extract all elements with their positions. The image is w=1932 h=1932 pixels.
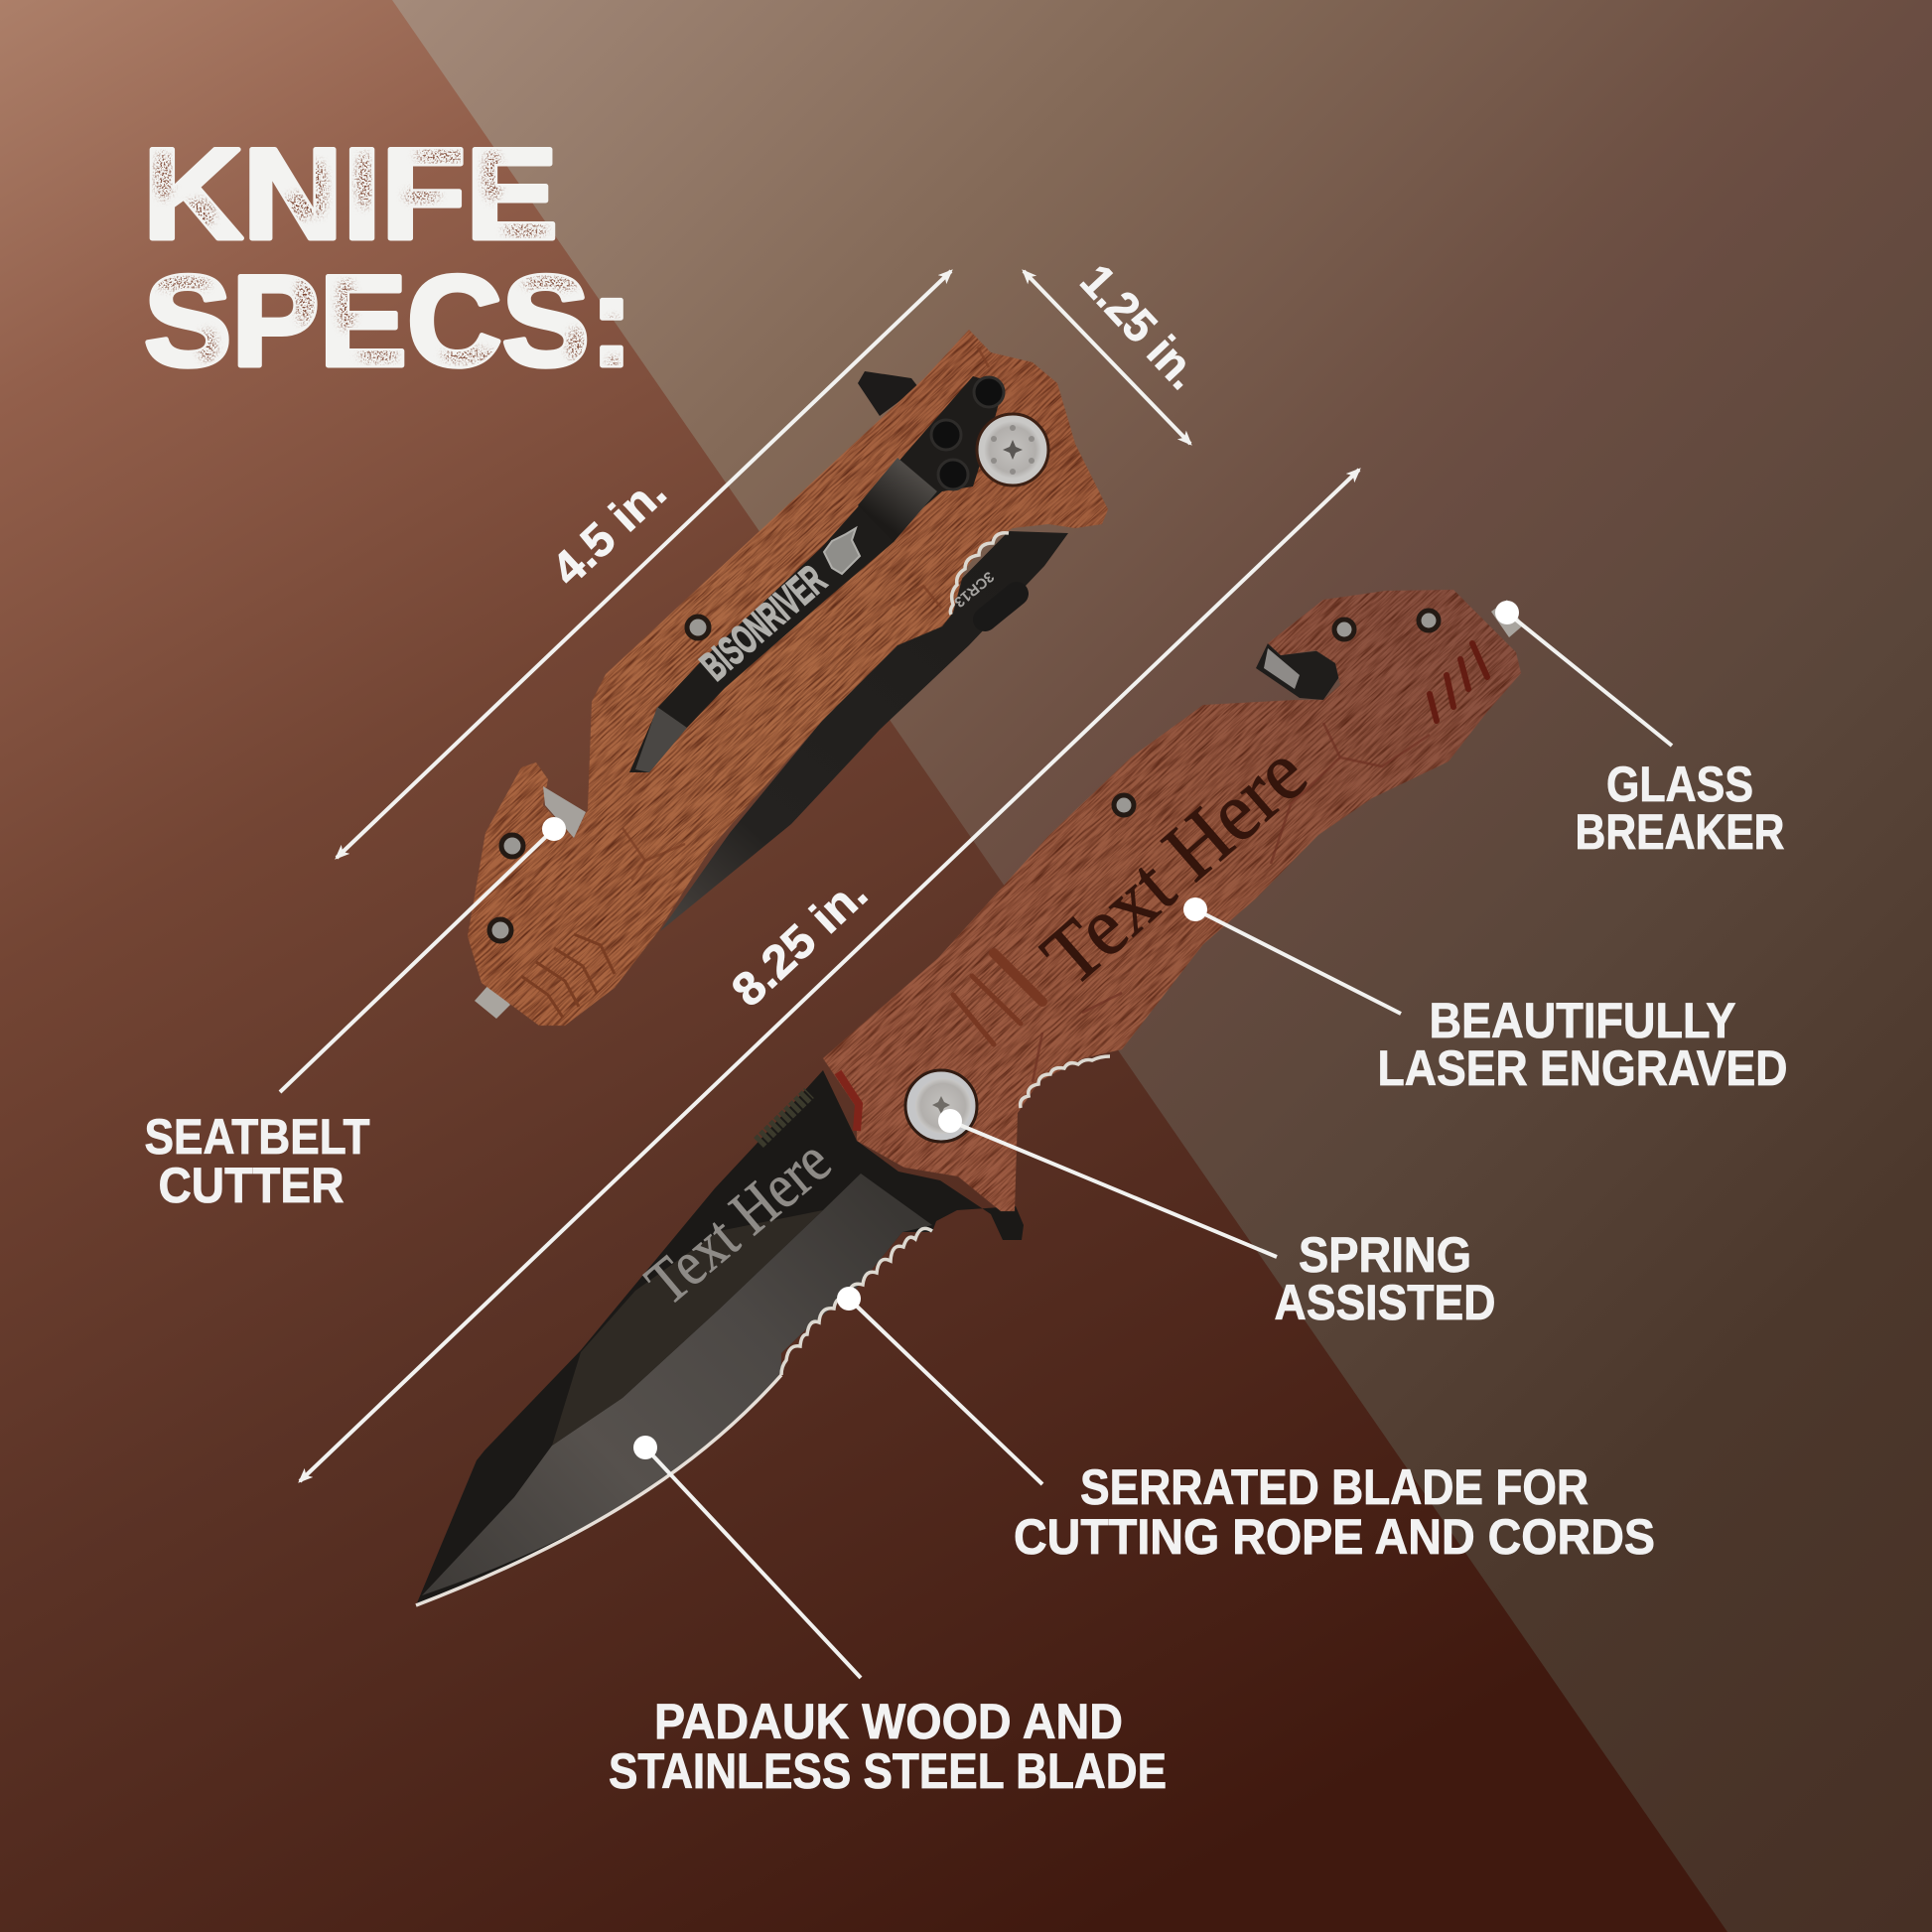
pivot screw	[977, 414, 1048, 485]
pivot screw	[905, 1070, 977, 1142]
small screws	[1114, 611, 1439, 815]
dimension: 8.25 in.	[300, 470, 1359, 1481]
dimension: 4.5 in.: 4.5 in.	[541, 465, 676, 596]
callout: seatbelt cutter: SEATBELT	[145, 1109, 369, 1165]
bison river logo: BISONRIVER	[691, 556, 835, 689]
callout: serrated blade: CUTTING ROPE AND CORDS	[1014, 1509, 1655, 1565]
title: SPECS:	[144, 248, 633, 393]
thumb stud	[985, 594, 1017, 620]
blade engraved text: Text Here	[632, 1125, 843, 1318]
thumb stud	[759, 1093, 809, 1143]
callout: materials: STAINLESS STEEL BLADE	[609, 1743, 1167, 1799]
background light diagonal overlay	[392, 0, 1932, 1932]
handle slot and clip	[629, 376, 1004, 772]
wood veins	[622, 347, 989, 880]
wood handle	[513, 241, 1831, 1560]
serrated edge	[950, 533, 1009, 615]
hook metal	[1256, 643, 1343, 700]
wood veins	[1033, 723, 1430, 1082]
callout: serrated blade	[837, 1287, 1655, 1565]
clip highlight	[858, 458, 937, 542]
knife: folded back view	[120, 10, 1455, 1345]
callout: laser engraved	[1183, 897, 1787, 1096]
callout: glass breaker: BREAKER	[1575, 804, 1785, 860]
glass breaker tip	[475, 983, 510, 1019]
seatbelt cutter metal	[543, 786, 586, 838]
callout: laser engraved: LASER ENGRAVED	[1378, 1040, 1787, 1096]
dimension: 1.25 in.: 1.25 in.	[1071, 254, 1211, 399]
callout: laser engraved: BEAUTIFULLY	[1430, 993, 1735, 1048]
callout: spring assisted: SPRING	[1299, 1227, 1471, 1283]
callout: glass breaker: GLASS	[1606, 757, 1753, 812]
callout: materials: PADAUK WOOD AND	[654, 1694, 1123, 1749]
grip lines	[953, 953, 1042, 1044]
callout: seatbelt cutter: CUTTER	[159, 1158, 344, 1213]
bison head icon	[824, 528, 860, 574]
wood handle	[120, 10, 1455, 1345]
callout: serrated blade: SERRATED BLADE FOR	[1080, 1459, 1588, 1515]
slash marks	[1430, 643, 1487, 721]
blade edge	[416, 1375, 781, 1605]
blade mid shade	[552, 1210, 823, 1446]
callout: materials	[609, 1436, 1167, 1799]
callout: spring assisted: ASSISTED	[1275, 1275, 1495, 1330]
steel marking: 3CR13	[951, 568, 997, 611]
callout: glass breaker	[1495, 601, 1785, 860]
handle serration	[1021, 1056, 1110, 1108]
dimension: 4.5 in.	[337, 271, 951, 858]
serrated edge	[781, 1228, 932, 1375]
handle engraved text: Text Here	[1025, 727, 1323, 1004]
title	[145, 147, 623, 369]
dimension: 1.25 in.	[1024, 254, 1211, 444]
handle red end	[838, 1072, 859, 1131]
glass breaker tip	[1491, 600, 1523, 637]
small screws and bolts	[489, 377, 1004, 941]
title: KNIFE	[143, 121, 558, 266]
blade bevel	[422, 1173, 932, 1595]
knife: open front view	[416, 241, 1831, 1605]
pocket clip lever	[858, 371, 918, 416]
folded blade	[660, 531, 1068, 931]
blade	[416, 1070, 1024, 1605]
callout: seatbelt cutter	[145, 817, 566, 1213]
dimension: 8.25 in.: 8.25 in.	[721, 866, 877, 1017]
callout: spring assisted	[938, 1109, 1495, 1330]
chevron grip	[521, 934, 615, 1018]
